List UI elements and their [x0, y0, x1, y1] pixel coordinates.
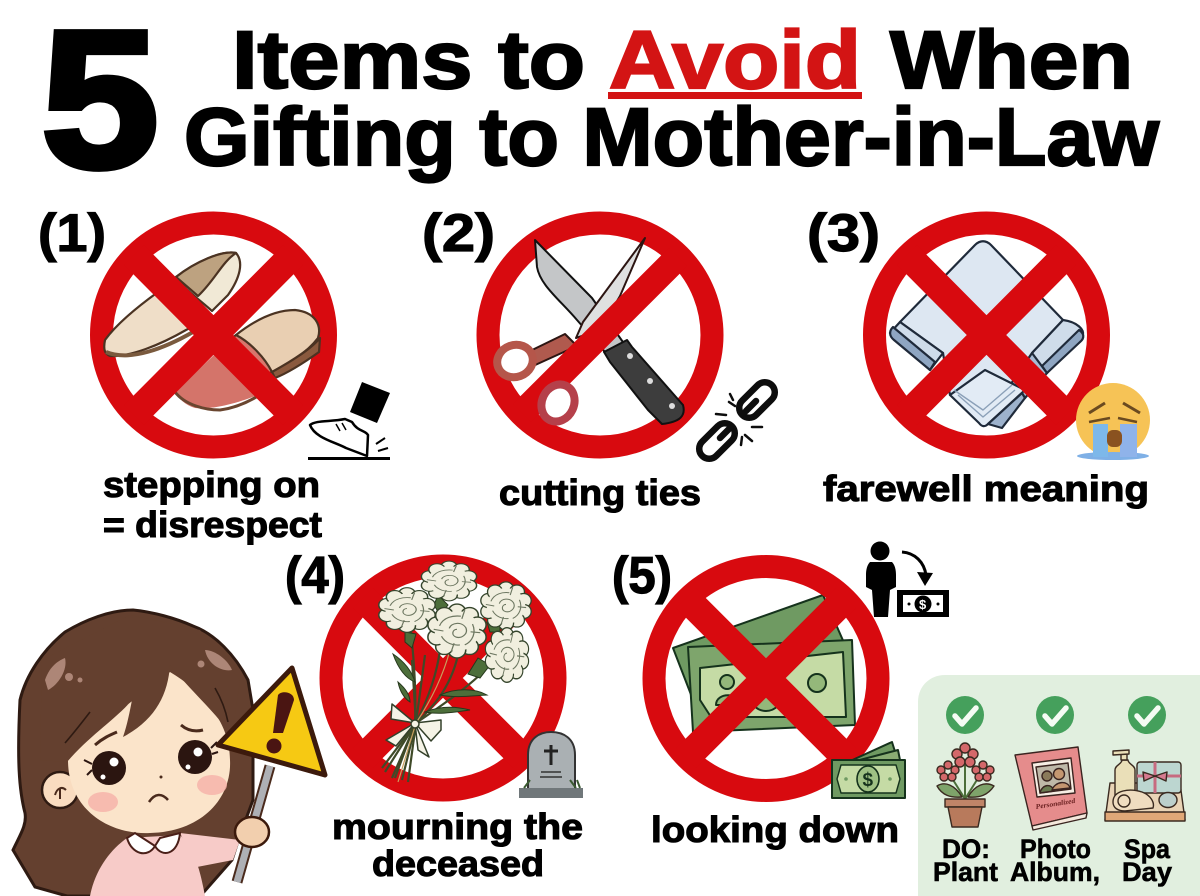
prohibition sign: [331, 566, 555, 790]
icon: stack of bills: [832, 742, 905, 798]
caption: = disrespect: [103, 504, 322, 545]
caption: [332, 806, 583, 884]
panel: item 5 money: [612, 542, 949, 850]
body: [90, 835, 205, 896]
prohibition sign: [654, 566, 878, 790]
small dollar sign: $: [919, 597, 927, 612]
warning triangle: [218, 668, 325, 775]
icon: check 2: [1036, 696, 1074, 734]
label: photo album: [1010, 834, 1100, 887]
icon: scissors second handle: [535, 379, 581, 427]
caption: deceased: [372, 843, 544, 884]
panel: item 4 flowers: [285, 547, 583, 884]
label: plant: DO:: [942, 834, 990, 864]
label: photo album: Album,: [1010, 857, 1100, 887]
illustration: worried girl with warning sign: [13, 610, 325, 896]
icon: crying emoji: [1076, 383, 1150, 460]
title: [41, 0, 1159, 209]
panel: do gifts: [918, 675, 1200, 896]
icon: check 3: [1128, 696, 1166, 734]
label: plant: Plant: [933, 857, 998, 887]
label: spa day: Spa: [1124, 834, 1171, 864]
prohibition cross: [134, 255, 293, 415]
heading line 2: Gifting to Mother-in-Law: [184, 92, 1159, 183]
icon: photo album: [1015, 747, 1087, 830]
bangs: [40, 615, 240, 762]
icon: person looking down at money: [866, 542, 949, 617]
icon: white carnation bouquet: [379, 561, 531, 782]
exclamation mark: [266, 692, 294, 754]
item number 1: (1): [38, 204, 106, 263]
item number 2: (2): [422, 204, 495, 263]
mouth: [149, 795, 168, 802]
prohibition bar: [522, 257, 678, 413]
blush: [88, 775, 227, 812]
icon: cash bills: [673, 595, 855, 732]
hair highlights: [45, 650, 232, 690]
ear: [42, 772, 78, 808]
personalized label: Personalized: [1035, 797, 1076, 811]
item number 3: (3): [807, 204, 880, 263]
arm: [180, 833, 240, 867]
ribbon: [386, 704, 441, 757]
icon: slippers: [104, 253, 320, 410]
caption: mourning the: [332, 806, 583, 847]
label: spa day: Day: [1122, 857, 1172, 887]
icon: foot stepping: [308, 382, 390, 460]
heading highlight: Avoid: Avoid: [609, 15, 861, 106]
panel background: [918, 675, 1200, 896]
panel: item 1 shoes: [38, 204, 390, 545]
item number 4: (4): [285, 547, 345, 605]
leaves: [393, 595, 500, 713]
caption: [103, 464, 322, 545]
sign pole: [237, 766, 270, 882]
item number 5: (5): [612, 547, 672, 605]
caption: cutting ties: [499, 472, 701, 513]
hand: [235, 817, 269, 847]
sign ring: [102, 223, 326, 447]
dollar sign glyph: $: [862, 770, 874, 791]
icon: spa tray: [1105, 750, 1185, 821]
sign ring: [488, 223, 712, 447]
icon: broken chain: [695, 378, 779, 463]
icon: scissors blade and first handle: [493, 238, 645, 382]
caption: looking down: [651, 809, 899, 850]
icon: gravestone: [519, 732, 583, 798]
prohibition sign: [874, 223, 1098, 447]
collar: [127, 833, 180, 853]
panel: item 2 scissors and knife: [422, 204, 779, 513]
label: plant: [933, 834, 998, 887]
heading line 1: Items to: [232, 15, 585, 106]
icon: potted plant: [937, 743, 994, 827]
hair back: [13, 610, 253, 896]
flower heads: [421, 561, 477, 601]
caption: farewell meaning: [823, 468, 1149, 509]
label: spa day: [1122, 834, 1172, 887]
heading word: When: When: [890, 15, 1133, 106]
eyes: [84, 725, 218, 785]
face: [68, 672, 230, 833]
hair strands: [65, 688, 228, 743]
icon: check 1: [946, 696, 984, 734]
panel: item 3 handkerchief: [807, 204, 1150, 509]
icon: handkerchief: [890, 241, 1083, 428]
icon: knife: [535, 240, 684, 424]
nose: [160, 776, 162, 778]
label: photo album: Photo: [1020, 834, 1091, 864]
caption: stepping on: [103, 464, 320, 505]
